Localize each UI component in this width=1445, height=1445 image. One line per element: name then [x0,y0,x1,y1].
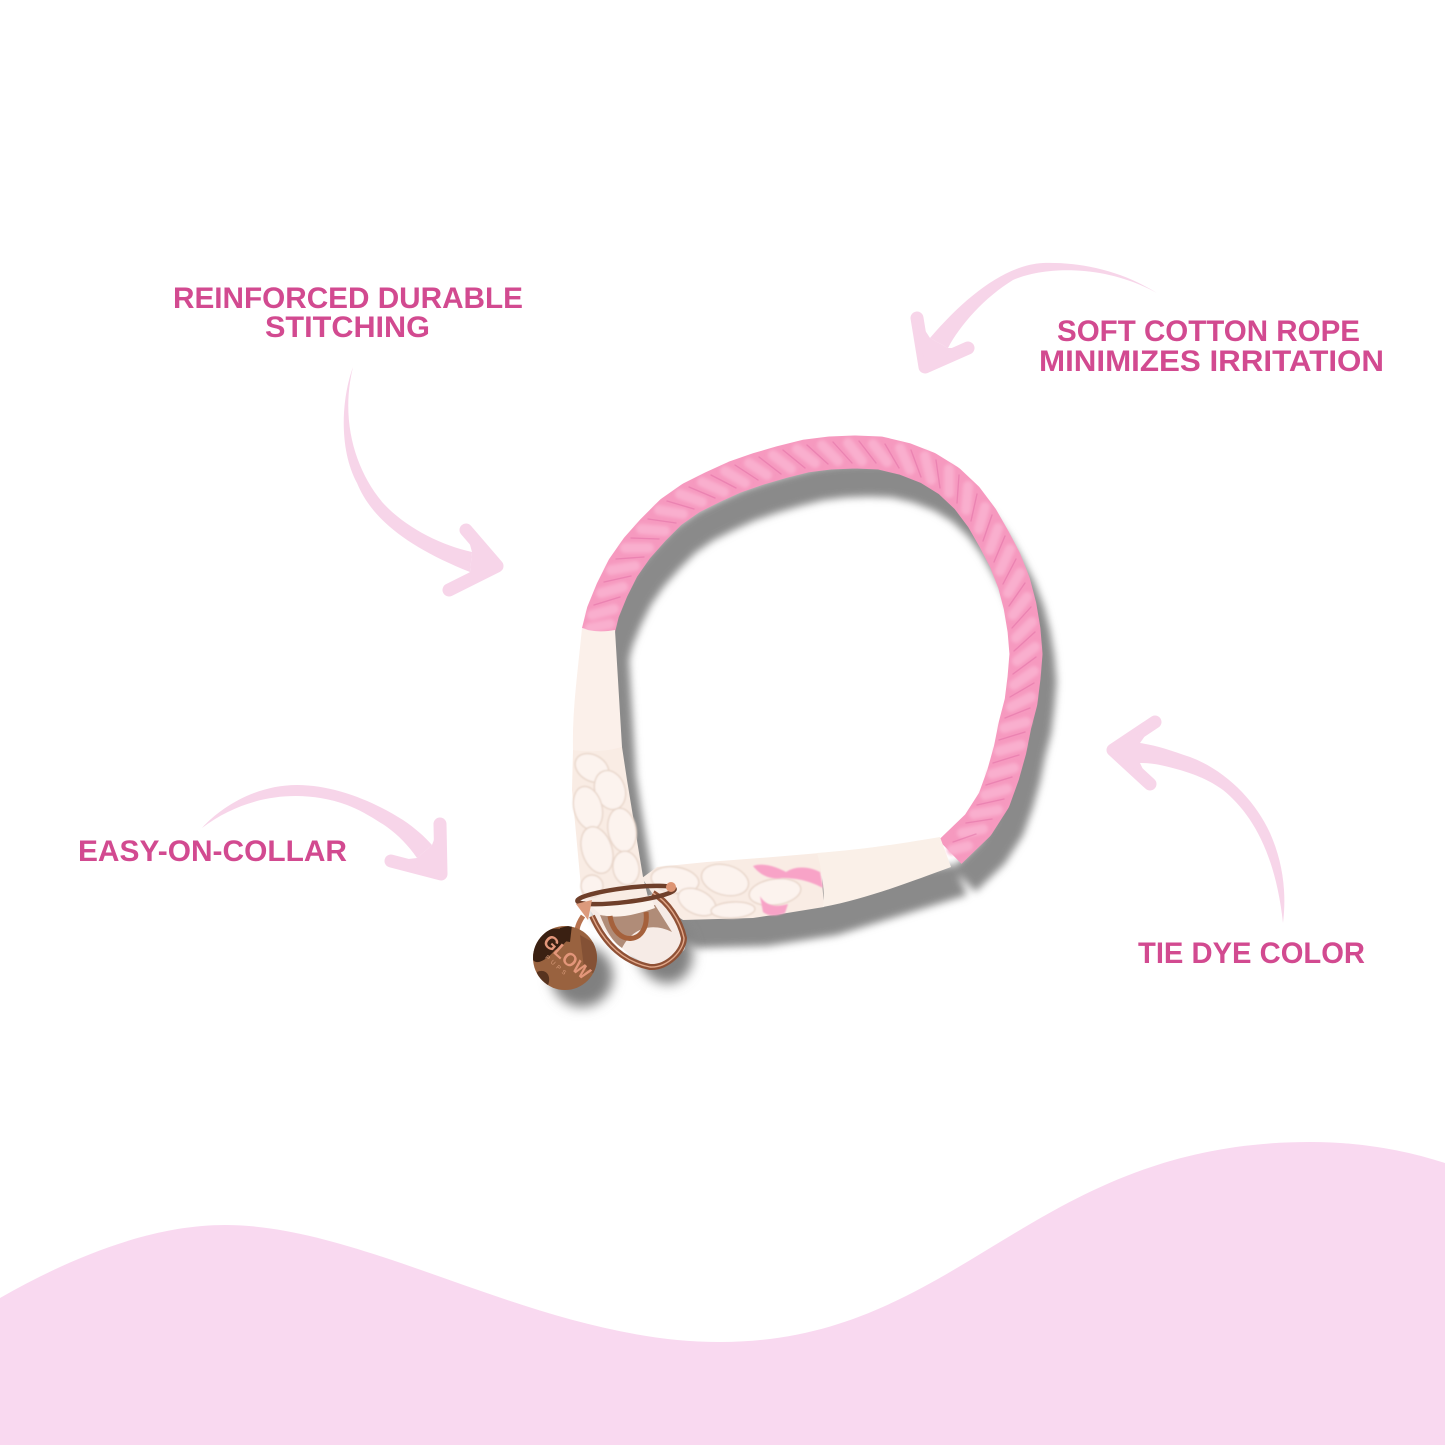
callout: soft cotton rope [917,263,1384,378]
bottom wave band [0,1142,1445,1445]
tag lettering: GLOW [539,931,594,984]
pink dye patches [753,865,823,916]
tag and ring shadow [551,908,702,1007]
label: tie dye color: TIE DYE COLOR [1138,937,1365,970]
label: reinforced stitching: REINFORCED DURABLE [173,282,523,315]
callout: tie dye color [1113,722,1365,970]
label: soft cotton rope [1039,315,1384,378]
arrow: easy-on collar [202,785,441,874]
collar illustration [533,441,1036,990]
label: easy-on collar: EASY-ON-COLLAR [78,835,347,868]
metal D-ring hardware [576,882,685,967]
arrow: soft cotton rope [917,263,1157,367]
round brand tag [533,925,598,990]
callout: reinforced stitching [173,282,523,590]
pink twisted rope [590,441,1036,852]
cream thread wrap, lower [817,837,951,907]
tag lettering: PUPS [543,955,567,977]
cream braided splice, horizontal [642,853,824,921]
label: reinforced stitching: STITCHING [265,311,430,344]
cream braided splice, vertical [569,747,650,925]
callout: easy-on collar [78,785,441,874]
collar drop shadow [586,480,1040,948]
cream thread wrap, upper [573,628,622,751]
arrow: reinforced stitching [344,367,497,590]
label: soft cotton rope: MINIMIZES IRRITATION [1039,345,1384,378]
label: reinforced stitching [173,282,523,344]
label: soft cotton rope: SOFT COTTON ROPE [1057,315,1360,348]
arrow: tie dye color [1113,722,1284,923]
